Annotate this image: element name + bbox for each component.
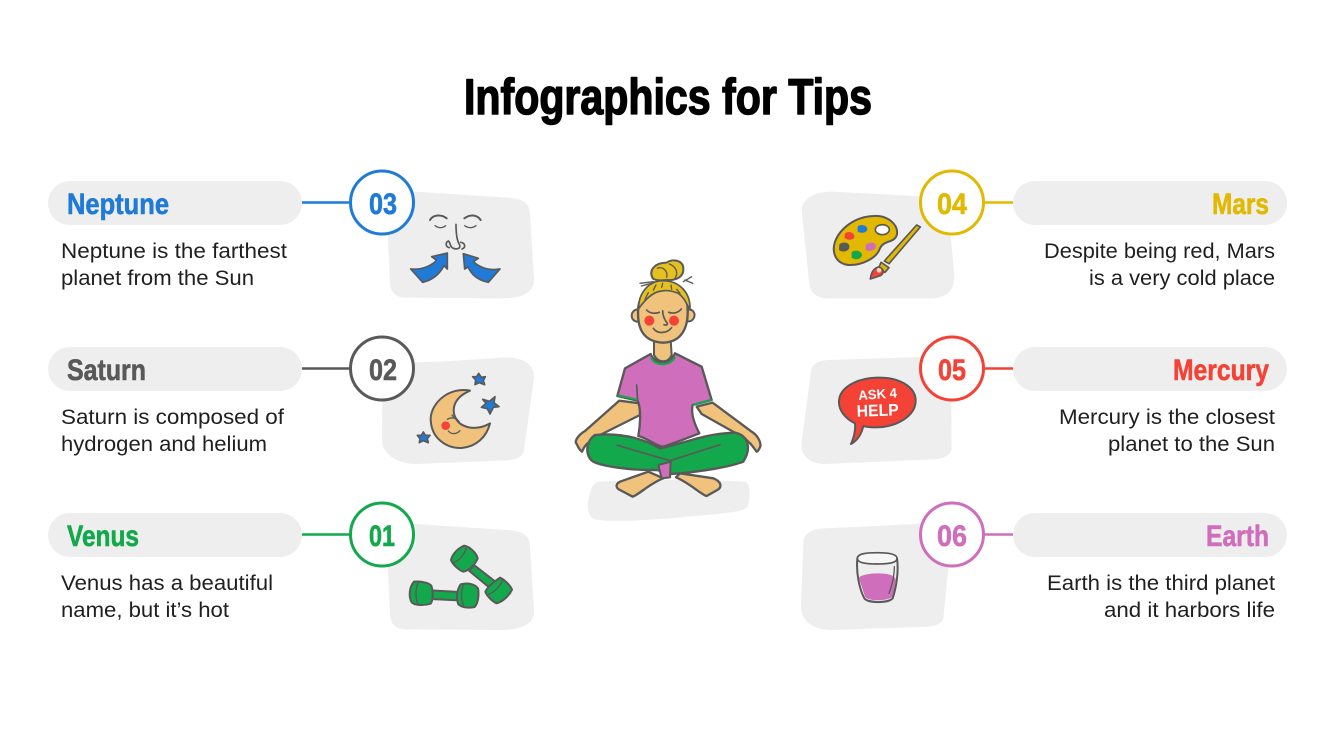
connector: Saturn (302, 367, 352, 370)
icon: breathing face (386, 192, 534, 298)
arms (576, 401, 760, 452)
pill: Mercury (1013, 347, 1287, 391)
number badge: 06 (920, 503, 984, 566)
text: Saturn description (61, 406, 284, 456)
connector: Earth (982, 533, 1013, 536)
number badge: 05 (920, 337, 984, 400)
head (638, 288, 688, 343)
icon: ask for help speech bubble: ASK 4 (858, 385, 898, 403)
hair bun (651, 260, 683, 280)
number badge: 02: 02 (369, 354, 397, 387)
heading: Venus: Venus (67, 520, 139, 553)
number badge: 01: 01 (369, 520, 395, 553)
icon: ask for help speech bubble (801, 357, 952, 464)
text: Mars description: is a very cold place (1089, 267, 1275, 290)
text: Saturn description: Saturn is composed of (61, 406, 284, 429)
number badge: 05: 05 (938, 354, 966, 387)
number badge: 03 (350, 171, 414, 234)
pill: Saturn (48, 347, 302, 391)
ears (632, 310, 694, 322)
panel: Saturn tip (48, 337, 534, 464)
neck (654, 340, 672, 361)
text: Mars description (1044, 240, 1275, 290)
connector: Mercury (982, 367, 1013, 370)
panel: Mercury tip (801, 337, 1287, 464)
illustration: meditating woman (576, 260, 760, 521)
panel: Venus tip (48, 503, 534, 630)
panel: Earth tip (801, 503, 1287, 630)
text: Saturn description: hydrogen and helium (61, 433, 267, 456)
facial features (647, 309, 681, 333)
feet (617, 472, 720, 497)
icon: sleeping moon and stars (382, 357, 534, 464)
connector: Neptune (302, 201, 352, 204)
number badge: 01 (350, 503, 414, 566)
text: Neptune description (61, 240, 287, 290)
hair (639, 281, 690, 309)
text: Earth description (1047, 572, 1275, 622)
number badge: 04 (920, 171, 984, 234)
text: Mars description: Despite being red, Mars (1044, 240, 1275, 263)
heading: Neptune: Neptune (67, 188, 169, 221)
pill: Mars (1013, 181, 1287, 225)
text: Mercury description: Mercury is the closest (1059, 406, 1275, 429)
icon: paint palette and brush (802, 192, 954, 298)
heading: Mercury: Mercury (1173, 354, 1269, 387)
heading: Earth: Earth (1206, 520, 1269, 553)
text: Mercury description: planet to the Sun (1108, 433, 1275, 456)
text: Neptune description: Neptune is the farthest (61, 240, 287, 263)
text: Venus description: Venus has a beautiful (61, 572, 273, 595)
text: Earth description: and it harbors life (1104, 599, 1275, 622)
text: Mercury description (1059, 406, 1275, 456)
ground shadow (588, 480, 750, 521)
heading: Mars: Mars (1212, 188, 1269, 221)
pill: Neptune (48, 181, 302, 225)
stray hairs (640, 277, 693, 286)
text: Neptune description: planet from the Sun (61, 267, 254, 290)
number badge: 02 (350, 337, 414, 400)
shirt trim (619, 358, 711, 405)
green trousers (587, 433, 748, 474)
icon: dumbbells (386, 524, 534, 630)
number badge: 04: 04 (937, 188, 967, 221)
pill: Earth (1013, 513, 1287, 557)
connector: Venus (302, 533, 352, 536)
title: Infographics for Tips (464, 69, 872, 125)
cheeks (644, 316, 679, 326)
text: Venus description (61, 572, 273, 622)
number badge: 06: 06 (937, 520, 967, 553)
panel: Neptune tip (48, 171, 534, 298)
pill: Venus (48, 513, 302, 557)
connector: Mars (982, 201, 1013, 204)
text: Venus description: name, but it’s hot (61, 599, 229, 622)
ankle cuff (658, 462, 671, 478)
icon: ask for help speech bubble: HELP (856, 400, 899, 421)
heading: Saturn: Saturn (67, 354, 146, 387)
panel: Mars tip (802, 171, 1287, 298)
number badge: 03: 03 (369, 188, 397, 221)
icon: glass of water (801, 523, 951, 630)
pink t-shirt (617, 353, 712, 447)
text: Earth description: Earth is the third planet (1047, 572, 1275, 595)
